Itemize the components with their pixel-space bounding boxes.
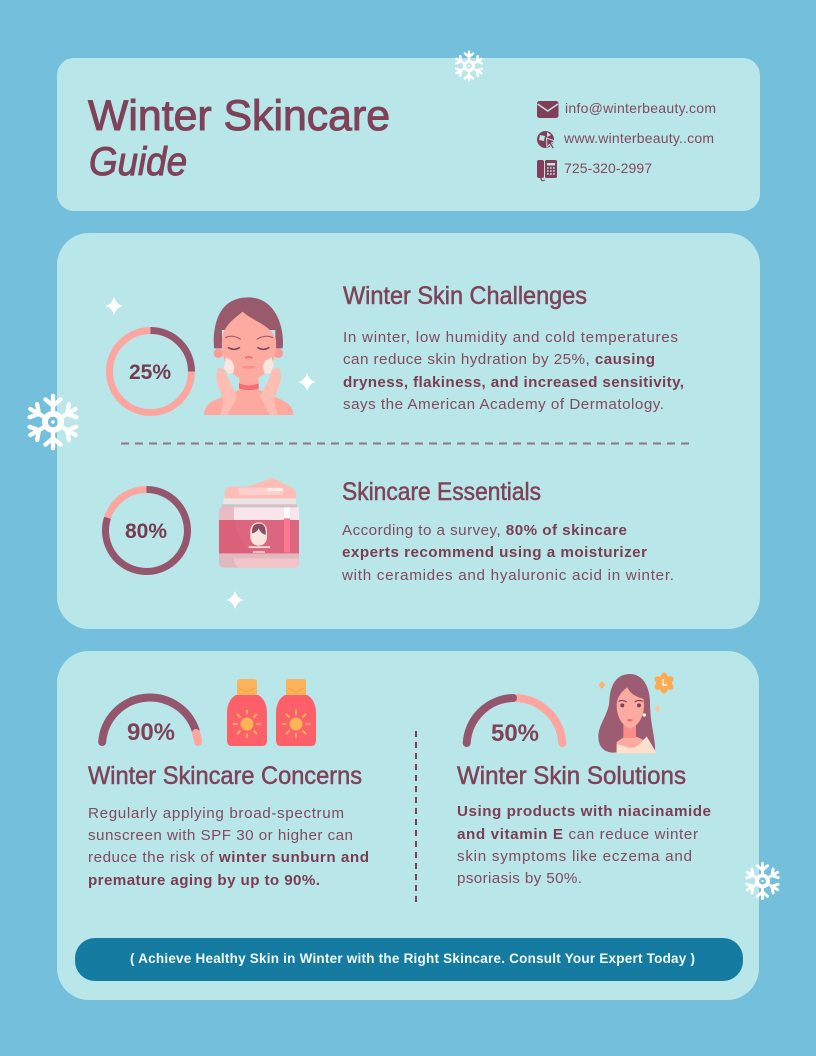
text: concerns body: reduce the risk of winter sunburn and: [88, 849, 369, 866]
icon: globe cursor: [537, 131, 555, 149]
chart: 80 percent ring: 80%: [125, 520, 167, 543]
icon: orange clock badge: [654, 672, 674, 694]
text: concerns body: sunscreen with SPF 30 or higher can: [88, 827, 353, 844]
icon: cream jar: [219, 477, 299, 568]
panel: header: [57, 58, 760, 211]
panel: challenges and essentials: [57, 233, 760, 629]
text: solutions body: and vitamin E can reduce winter: [457, 826, 698, 843]
text: essentials body: [341, 522, 674, 584]
website text: www.winterbeauty..com: [563, 130, 714, 146]
text: solutions body: psoriasis by 50%.: [457, 870, 582, 887]
email text: info@winterbeauty.com: [565, 100, 716, 116]
icon: sparkle: [226, 591, 244, 609]
heading: winter skin challenges: Winter Skin Challenges: [343, 282, 587, 310]
callout button: ( Achieve Healthy Skin in Winter with the Right Skincare. Consult Your Expert Today ): [130, 951, 695, 966]
title: [88, 92, 390, 184]
text: solutions body: [457, 803, 711, 887]
heading: concerns: Winter Skincare Concerns: [88, 762, 362, 790]
heading: solutions: Winter Skin Solutions: [457, 762, 686, 790]
chart: 25 percent ring: [110, 330, 192, 412]
chart: 80 percent ring: [105, 490, 188, 572]
text: solutions body: Using products with niacinamide: [457, 803, 711, 820]
icon: sunscreen bottle: [227, 679, 267, 746]
text: concerns body: premature aging by up to 90%.: [88, 872, 320, 889]
chart: 50 percent gauge: [467, 698, 562, 747]
text: challenges body: [343, 329, 684, 413]
icon: sunscreen bottle: [276, 679, 316, 746]
icon: small sparkle: [654, 705, 660, 712]
icon: sparkle: [298, 373, 316, 391]
text: essentials body: experts recommend using a moisturizer: [342, 544, 647, 561]
icon: snowflake left: [27, 396, 79, 448]
chart: 90 percent gauge: [102, 698, 198, 746]
text: challenges body: In winter, low humidity and cold temperatures: [343, 329, 678, 346]
callout button: [75, 938, 743, 981]
text: challenges body: dryness, flakiness, and increased sensitivity,: [343, 374, 684, 391]
icon: sparkle: [106, 297, 122, 315]
chart: 50 percent gauge: 50%: [491, 720, 539, 747]
text: challenges body: can reduce skin hydration by 25%, causing: [343, 351, 655, 368]
icon: snowflake right: [745, 863, 780, 899]
heading: skincare essentials: Skincare Essentials: [342, 478, 541, 506]
icon: telephone: [537, 160, 557, 181]
title: Winter Skincare: [88, 92, 390, 140]
text: concerns body: [88, 805, 369, 889]
text: challenges body: says the American Academy of Dermatology.: [343, 396, 664, 413]
text: solutions body: skin symptoms like eczema and: [457, 848, 692, 865]
text: concerns body: Regularly applying broad-spectrum: [88, 805, 344, 822]
title: Guide: [89, 140, 187, 184]
panel: concerns and solutions: [57, 651, 759, 1000]
icon: snowflake top: [454, 52, 484, 80]
text: essentials body: According to a survey, 80% of skincare: [342, 522, 627, 539]
text: essentials body: with ceramides and hyaluronic acid in winter.: [341, 567, 674, 584]
phone text: 725-320-2997: [564, 160, 652, 176]
icon: envelope: [537, 101, 558, 118]
icon: face washing woman: [204, 297, 293, 415]
chart: 25 percent ring: 25%: [129, 361, 171, 384]
chart: 90 percent gauge: 90%: [127, 719, 175, 746]
icon: small sparkle: [598, 681, 606, 689]
icon: woman with long hair: [598, 674, 656, 753]
